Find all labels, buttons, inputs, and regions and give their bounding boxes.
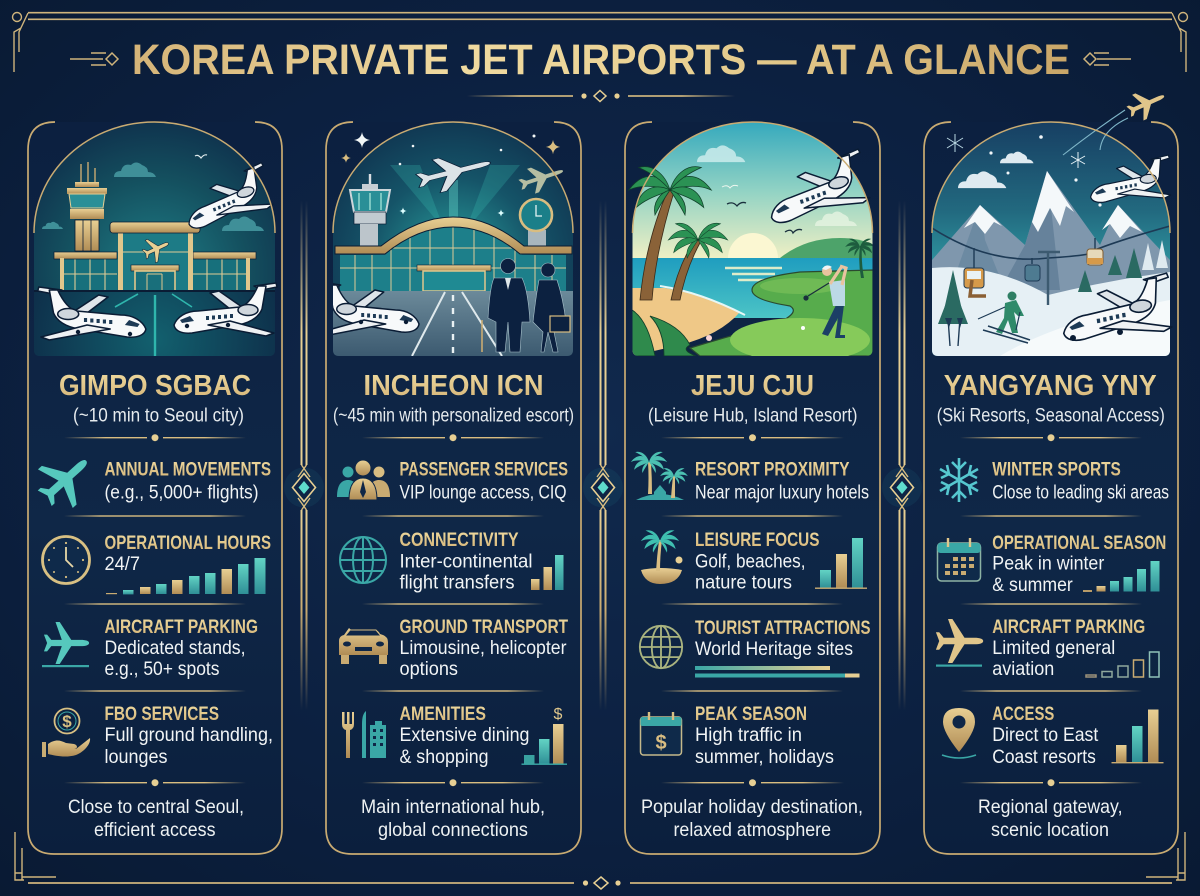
access note: (~10 min to Seoul city) xyxy=(73,404,244,426)
tower xyxy=(67,162,107,251)
icon: calendar with dollar xyxy=(640,712,682,755)
text: RESORT PROXIMITY xyxy=(695,458,850,480)
jet: parked xyxy=(333,283,420,335)
cable lift xyxy=(932,226,1170,305)
text: PASSENGER SERVICES xyxy=(400,458,568,480)
text: AIRCRAFT PARKING xyxy=(992,616,1145,638)
sparkles xyxy=(341,132,560,165)
column divider 1 xyxy=(284,200,324,710)
icon: calendar xyxy=(938,538,980,581)
illustration: Jeju beach and golf xyxy=(629,122,875,362)
row: tourist attractions xyxy=(640,617,870,678)
text: LEISURE FOCUS xyxy=(695,529,820,551)
mountains xyxy=(932,171,1170,300)
row: operational season xyxy=(938,532,1166,596)
text: Near major luxury hotels xyxy=(695,482,869,504)
jet: parked xyxy=(1057,273,1176,345)
divider with dot xyxy=(661,779,844,786)
trees xyxy=(938,248,1142,324)
divider with dot xyxy=(960,779,1142,786)
row: annual movements xyxy=(27,442,271,518)
text: 24/7 xyxy=(104,553,140,575)
footer note xyxy=(68,796,244,841)
jet: parked left xyxy=(38,287,146,340)
row: amenities xyxy=(342,703,567,768)
row: winter sports xyxy=(940,458,1169,504)
text xyxy=(400,458,568,504)
text: flight transfers xyxy=(400,572,515,594)
text xyxy=(992,616,1145,680)
row: passenger services xyxy=(337,458,568,504)
illustration: Gimpo terminal and jets xyxy=(34,122,277,356)
footer note xyxy=(641,796,863,841)
text xyxy=(400,616,568,680)
illustration: Yangyang ski resort xyxy=(932,83,1176,356)
divider with dot xyxy=(64,779,246,786)
text: e.g., 50+ spots xyxy=(104,658,220,680)
row: access xyxy=(942,703,1164,768)
text: High traffic in xyxy=(695,724,802,746)
bar chart: amenities xyxy=(522,706,567,765)
text: aviation xyxy=(992,658,1054,680)
text: TOURIST ATTRACTIONS xyxy=(695,617,870,639)
icon: dining and shopping xyxy=(342,711,386,758)
small plane xyxy=(516,158,567,197)
airport name: YANGYANG YNY xyxy=(944,370,1157,402)
chairlift xyxy=(964,248,986,296)
flying airliner xyxy=(413,146,494,197)
text: Full ground handling, xyxy=(104,724,273,746)
golfer xyxy=(801,265,846,338)
text: summer, holidays xyxy=(695,746,834,768)
text: AIRCRAFT PARKING xyxy=(104,616,258,638)
icon: palms and hut xyxy=(631,452,688,500)
airport name: INCHEON ICN xyxy=(364,370,544,402)
bar chart: outlined parking xyxy=(1086,652,1159,677)
text xyxy=(104,532,271,575)
footer note: scenic location xyxy=(991,819,1109,841)
text: ACCESS xyxy=(992,703,1054,725)
bar chart: access xyxy=(1112,710,1164,763)
text xyxy=(695,703,834,768)
text: Peak in winter xyxy=(992,552,1105,574)
row: aircraft parking xyxy=(42,616,258,680)
text xyxy=(992,458,1169,504)
column divider 3 xyxy=(882,200,922,710)
text: Direct to East xyxy=(992,724,1099,746)
tower xyxy=(350,174,390,246)
text: Coast resorts xyxy=(992,746,1096,768)
row: peak season xyxy=(640,703,834,768)
bar chart: amenities: $ xyxy=(554,706,563,723)
icon: snowflake xyxy=(940,458,978,502)
snow ground xyxy=(932,267,1170,356)
row: leisure focus xyxy=(641,529,867,594)
divider with dot xyxy=(960,434,1142,441)
panel: Gimpo SGBAC xyxy=(27,122,282,854)
row: ground transport xyxy=(339,616,568,680)
divider with dot xyxy=(362,434,544,441)
terminal xyxy=(335,217,572,291)
divider with dot xyxy=(64,434,246,441)
access note: (Leisure Hub, Island Resort) xyxy=(648,404,858,426)
title ornament left xyxy=(70,53,118,65)
text: GROUND TRANSPORT xyxy=(400,616,568,638)
icon: clock xyxy=(42,536,90,584)
jet: flying xyxy=(178,162,276,233)
icon: calendar with dollar: $ xyxy=(655,732,667,754)
icon: plane xyxy=(27,442,104,518)
text: Limited general xyxy=(992,637,1115,659)
footer note: relaxed atmosphere xyxy=(674,819,831,841)
text: & shopping xyxy=(400,746,488,768)
panel: Incheon ICN xyxy=(318,122,581,854)
text: World Heritage sites xyxy=(695,638,853,660)
text xyxy=(400,529,532,594)
text: CONNECTIVITY xyxy=(400,529,518,551)
title underline ornament xyxy=(467,90,735,102)
ski poles xyxy=(948,324,960,346)
airport name: JEJU CJU xyxy=(691,370,814,402)
text: nature tours xyxy=(695,572,792,594)
row: FBO services xyxy=(42,703,273,768)
divider with dot xyxy=(661,434,844,441)
text: PEAK SEASON xyxy=(695,703,807,725)
text xyxy=(104,703,273,768)
airport name: GIMPO SGBAC xyxy=(59,370,251,402)
footer note: global connections xyxy=(378,819,528,841)
text xyxy=(695,458,869,504)
footer note: Popular holiday destination, xyxy=(641,796,863,818)
row: aircraft parking xyxy=(936,616,1159,680)
bottom centre ornament xyxy=(583,877,621,889)
icon: plane landing xyxy=(42,622,89,667)
footer note: Regional gateway, xyxy=(978,796,1122,818)
icon: people xyxy=(337,460,390,500)
panel: Jeju CJU xyxy=(625,122,880,854)
text: FBO SERVICES xyxy=(104,703,219,725)
snowflakes xyxy=(947,134,1085,168)
jet: parked right xyxy=(174,283,277,336)
row: connectivity xyxy=(340,529,564,594)
text: Dedicated stands, xyxy=(104,637,246,659)
distant palm xyxy=(845,239,875,278)
text xyxy=(104,458,271,504)
row: operational hours xyxy=(42,532,271,594)
text xyxy=(400,703,530,768)
illustration: Incheon terminal with VIP passengers xyxy=(318,122,573,356)
text: Inter-continental xyxy=(400,550,532,572)
text: options xyxy=(400,658,458,680)
text: (e.g., 5,000+ flights) xyxy=(104,482,258,504)
title ornament right xyxy=(1084,53,1131,65)
text: Extensive dining xyxy=(400,724,530,746)
jet: flying xyxy=(1087,155,1173,206)
terminal xyxy=(54,222,256,291)
bar chart: connectivity xyxy=(531,555,564,590)
title: KOREA PRIVATE JET AIRPORTS — AT A GLANCE xyxy=(132,36,1070,84)
text: Limousine, helicopter xyxy=(400,637,567,659)
text: AMENITIES xyxy=(400,703,486,725)
text xyxy=(104,616,258,680)
panel: Yangyang YNY xyxy=(924,83,1178,854)
divider with dot xyxy=(362,779,544,786)
text xyxy=(695,617,870,660)
footer note xyxy=(361,796,545,841)
skier xyxy=(978,292,1030,343)
text: WINTER SPORTS xyxy=(992,458,1121,480)
footer note: Close to central Seoul, xyxy=(68,796,244,818)
bar chart: season xyxy=(1083,561,1160,592)
icon: hand with coin xyxy=(42,708,90,757)
progress bars: attractions xyxy=(695,666,860,678)
bar chart: hours xyxy=(106,558,266,594)
jet: flying xyxy=(760,149,874,228)
icon: hand with coin: $ xyxy=(62,712,72,731)
text xyxy=(992,532,1166,596)
text: ANNUAL MOVEMENTS xyxy=(104,458,271,480)
apron xyxy=(333,291,573,356)
text: VIP lounge access, CIQ xyxy=(400,482,566,504)
bar chart: leisure xyxy=(815,538,867,589)
gondola 2 xyxy=(1087,238,1103,265)
icon: car xyxy=(339,628,388,664)
icon: palm island xyxy=(641,530,682,584)
icon: globe xyxy=(340,537,386,583)
text: lounges xyxy=(104,746,168,768)
text xyxy=(992,703,1099,768)
gold plane with contrail xyxy=(1063,83,1170,155)
column divider 2 xyxy=(583,200,623,710)
palm trees xyxy=(629,167,728,300)
text: Golf, beaches, xyxy=(695,550,806,572)
access note: (~45 min with personalized escort) xyxy=(333,404,574,426)
icon: gold plane xyxy=(936,619,983,667)
clock xyxy=(520,199,552,248)
text xyxy=(695,529,820,594)
gondola 1 xyxy=(1025,258,1040,281)
footer note: Main international hub, xyxy=(361,796,545,818)
VIP passengers xyxy=(482,258,570,352)
footer note xyxy=(978,796,1122,841)
text: OPERATIONAL HOURS xyxy=(104,532,271,554)
row: resort proximity xyxy=(631,452,869,504)
footer note: efficient access xyxy=(94,819,216,841)
icon: globe xyxy=(640,626,682,668)
foreground leaves xyxy=(632,310,696,356)
icon: map pin xyxy=(942,708,976,758)
text: & summer xyxy=(992,574,1073,596)
